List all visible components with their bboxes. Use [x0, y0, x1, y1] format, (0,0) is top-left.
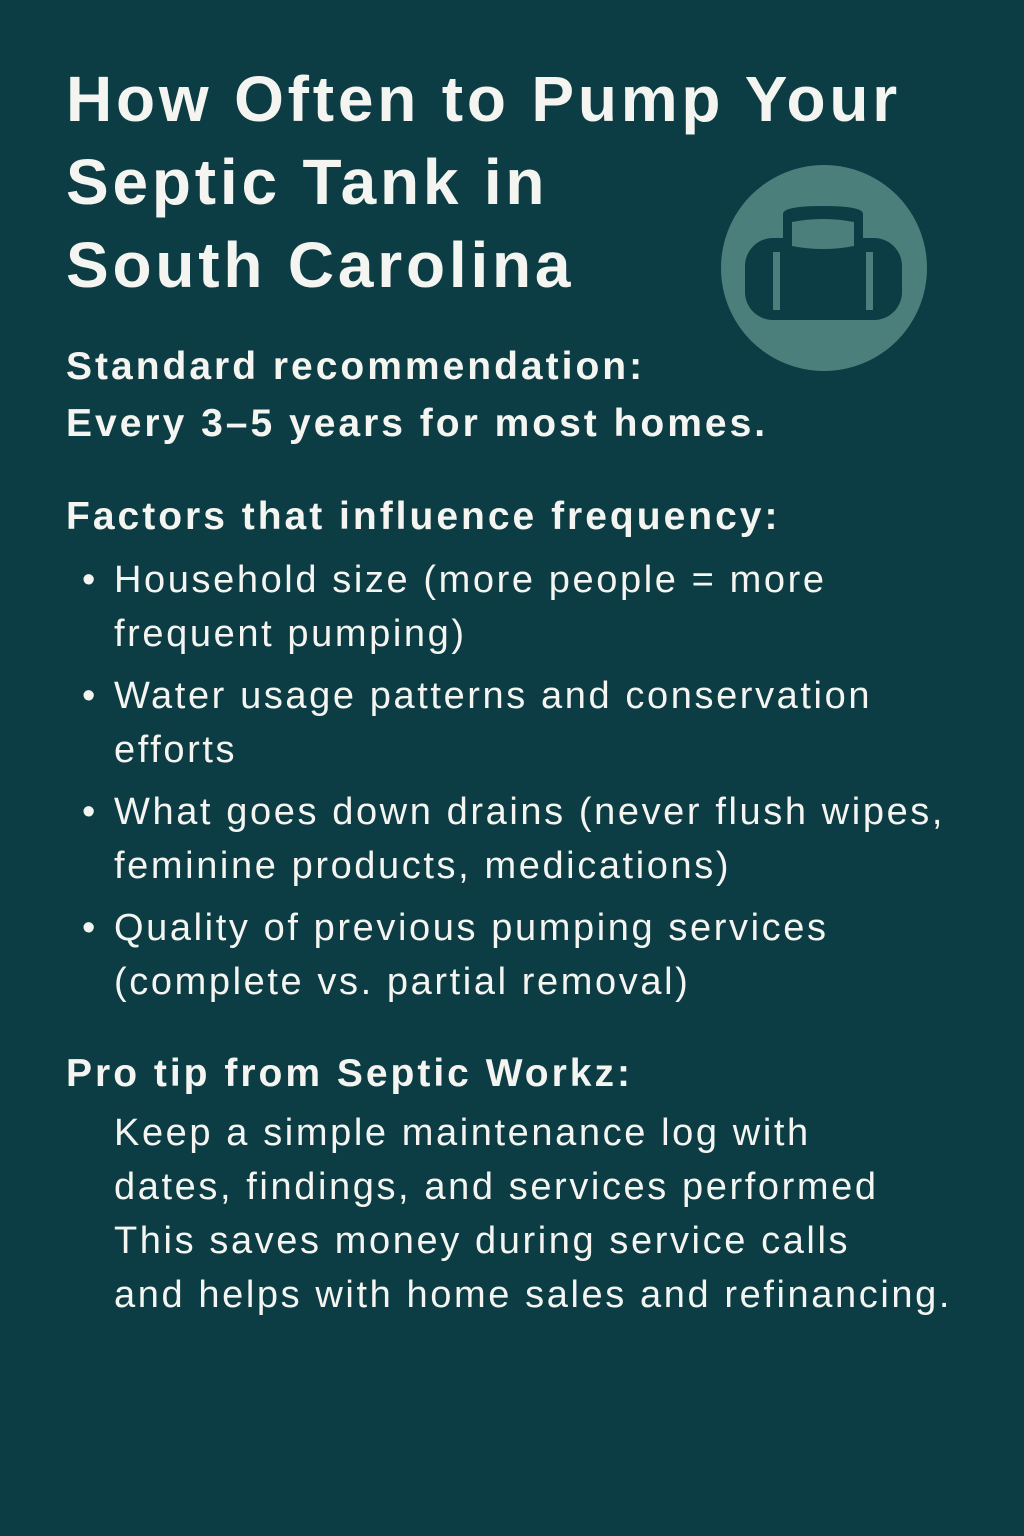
- pro tip text: and helps with home sales and refinancing.: [114, 1274, 952, 1316]
- pro tip text: dates, findings, and services performed: [114, 1166, 879, 1208]
- factors list: Water usage patterns and conservation: [114, 675, 872, 717]
- pro tip text: [114, 1112, 952, 1316]
- factors list: efforts: [114, 729, 237, 771]
- factors list: Household size (more people = more: [114, 559, 827, 601]
- title: Septic Tank in: [66, 146, 548, 218]
- factors list: frequent pumping): [114, 613, 467, 655]
- pro tip text: This saves money during service calls: [114, 1220, 850, 1262]
- standard recommendation: [66, 345, 768, 445]
- factors list: Quality of previous pumping services: [114, 907, 829, 949]
- factors list: (complete vs. partial removal): [114, 961, 690, 1003]
- standard recommendation: Every 3–5 years for most homes.: [66, 402, 768, 445]
- icon: septic tank: [721, 165, 927, 371]
- title: How Often to Pump Your: [66, 63, 901, 135]
- factors list: feminine products, medications): [114, 845, 731, 887]
- factors heading: Factors that influence frequency:: [66, 495, 780, 538]
- factors list: [84, 559, 945, 1003]
- pro tip text: Keep a simple maintenance log with: [114, 1112, 811, 1154]
- factors list: What goes down drains (never flush wipes,: [114, 791, 945, 833]
- pro tip heading: Pro tip from Septic Workz:: [66, 1052, 633, 1095]
- title: South Carolina: [66, 229, 574, 301]
- standard recommendation: Standard recommendation:: [66, 345, 645, 388]
- title: [66, 63, 901, 301]
